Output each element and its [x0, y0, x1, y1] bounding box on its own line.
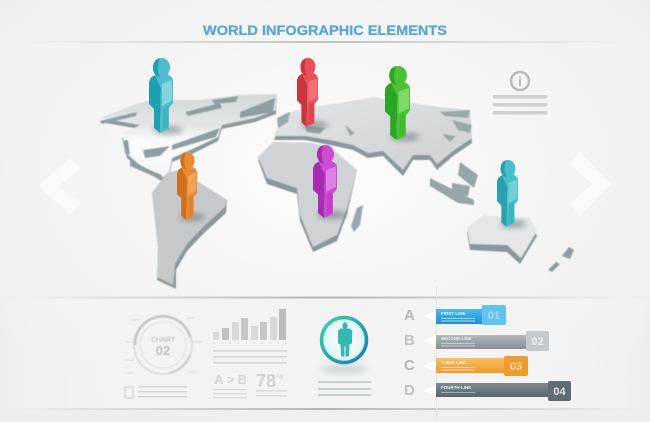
Southeast Asia islands [430, 162, 478, 205]
chart 02 dial: 02 [156, 343, 170, 358]
icon: right chevron [570, 152, 611, 216]
label 02: SECOND LINE [441, 336, 472, 341]
icon: left chevron [39, 157, 81, 215]
label 01: FIRST LINE [441, 311, 466, 316]
label 04 [423, 381, 571, 401]
person: red [297, 58, 318, 127]
bottom panel [0, 285, 650, 422]
label 03: THIRD LINE [441, 360, 466, 365]
78% stat: 78 [256, 371, 276, 391]
person: green [385, 66, 410, 140]
A>B stat: A>B [214, 372, 247, 387]
label 02: 02 [531, 336, 544, 348]
letter A: A [404, 307, 415, 324]
info icon [493, 72, 547, 114]
letter B: B [404, 332, 415, 349]
label 04: FOURTH LINE [441, 385, 471, 390]
title: WORLD INFOGRAPHIC ELEMENTS [203, 23, 447, 39]
South America [152, 170, 227, 289]
78% stat [256, 371, 287, 396]
Madagascar [351, 205, 363, 232]
chart 02 dial [125, 316, 202, 374]
label 02 [423, 331, 549, 351]
world map [100, 94, 574, 289]
chart 02 dial: CHART [151, 337, 176, 344]
person badge [318, 318, 371, 396]
North America [100, 94, 277, 182]
label 01: 01 [488, 310, 500, 322]
A>B stat [213, 372, 247, 398]
Eurasia [274, 97, 472, 176]
person: orange [177, 152, 197, 220]
legend lines under dial [125, 386, 187, 398]
person: teal [497, 160, 518, 227]
label 01 [423, 305, 506, 325]
info icon: i [518, 74, 522, 89]
78% stat: % [277, 374, 284, 381]
letter D: D [404, 382, 415, 399]
label 04: 04 [553, 386, 566, 398]
person: blue [149, 58, 173, 133]
letter C: C [404, 357, 415, 374]
person: purple [313, 145, 337, 218]
bar chart [213, 309, 287, 364]
New Zealand [548, 247, 574, 272]
Australia [467, 215, 537, 264]
person shadows [153, 121, 526, 228]
Africa [258, 142, 357, 252]
label 03: 03 [510, 361, 522, 373]
label 03 [423, 356, 528, 376]
